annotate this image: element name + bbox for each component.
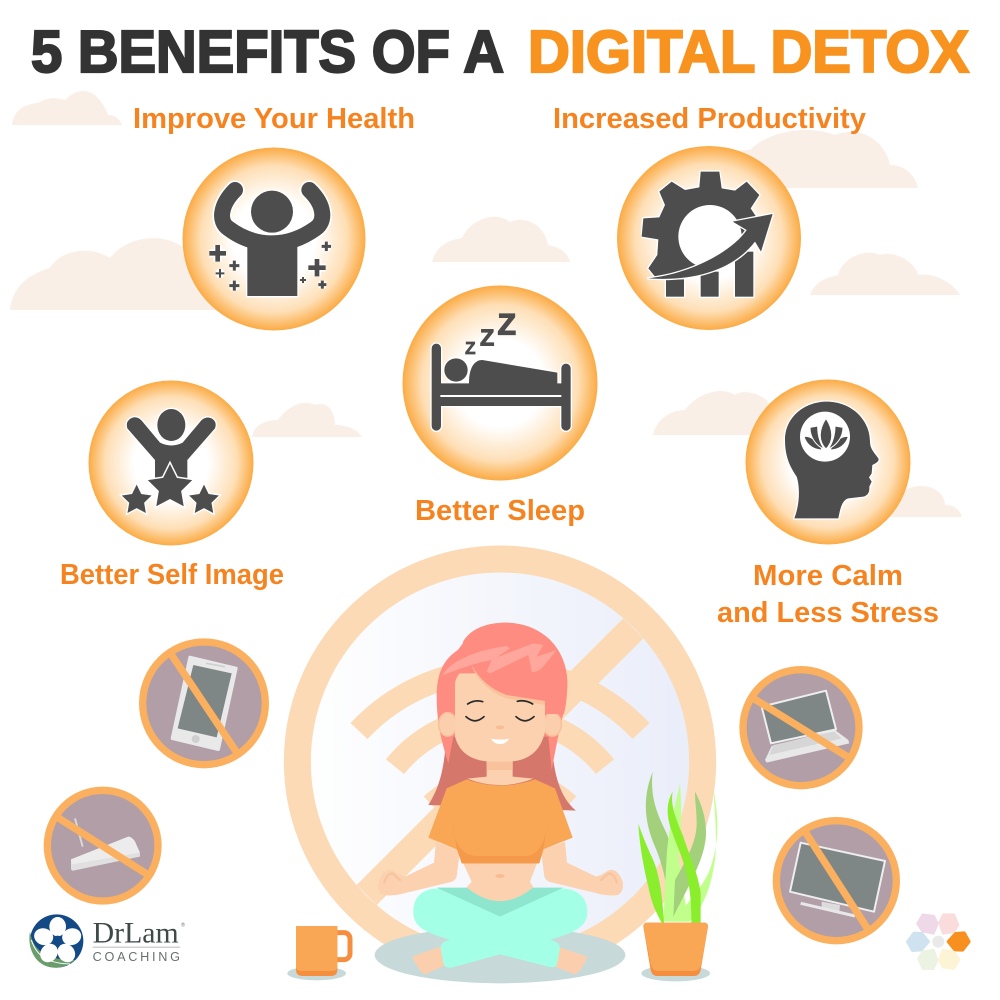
registered mark: ®: [181, 922, 185, 929]
floor shadow: [375, 927, 625, 983]
navel: [495, 874, 505, 878]
hair highlight: [443, 643, 557, 675]
heading: more calm and less stress: More Calm: [753, 560, 903, 592]
bangs: [455, 623, 567, 714]
arm left: [378, 842, 460, 895]
heading: increased productivity: Increased Productivity: [553, 103, 866, 135]
main hair: [437, 623, 567, 770]
heading: more calm and less stress: and Less Stress: [717, 597, 939, 629]
icon: better sleep: Z: [498, 309, 516, 342]
ears: [439, 713, 561, 736]
pants: [413, 888, 587, 968]
title: 5 BENEFITS OF A: [31, 19, 504, 85]
woman: [378, 623, 623, 974]
face: [455, 673, 545, 762]
background clouds: [10, 91, 962, 517]
coffee mug: [287, 926, 350, 980]
heading: improve your health: Improve Your Health: [133, 103, 415, 135]
logo emblem: [29, 914, 83, 968]
logo tagline: COACHING: [93, 950, 180, 964]
icon: better sleep: [402, 286, 598, 480]
neck shadow: [487, 761, 513, 770]
heading: more calm and less stress: [717, 560, 939, 629]
eyes and brows: [466, 701, 534, 721]
icon: increased productivity: [617, 146, 801, 330]
no laptop sign: [743, 670, 859, 786]
logo wordmark: DrLam: [93, 917, 179, 950]
icon: better self image: [88, 380, 254, 546]
icon: more calm and less stress: [746, 380, 910, 544]
icon: better sleep: Z: [480, 324, 494, 350]
shirt: [428, 779, 573, 863]
corner flower mark: [907, 910, 969, 973]
no monitor sign: [776, 821, 896, 941]
back hair: [428, 730, 576, 811]
shirt fold: [453, 818, 548, 863]
icon: better sleep: Z: [465, 338, 476, 358]
title: DIGITAL DETOX: [528, 19, 969, 85]
potted plant: [638, 772, 717, 981]
title: [31, 19, 969, 85]
finger lines: [384, 873, 617, 883]
heading: better self image: Better Self Image: [60, 559, 284, 591]
no-wifi circle: [297, 559, 703, 964]
bangs shadow: [472, 665, 545, 705]
heading: better sleep: Better Sleep: [415, 495, 585, 527]
mouth: [491, 739, 509, 744]
no phone sign: [143, 642, 265, 765]
scene: meditating woman with no-wifi sign: [287, 559, 717, 983]
icon: improve your health: [182, 148, 366, 330]
torso: [462, 860, 538, 901]
logo divider: [93, 947, 180, 948]
no router sign: [47, 790, 158, 901]
nose: [496, 725, 504, 729]
feet: [412, 947, 587, 974]
neck: [467, 757, 533, 785]
pants shadow: [437, 888, 563, 917]
logo: DrLam Coaching: [29, 914, 185, 968]
arm right: [541, 842, 623, 895]
